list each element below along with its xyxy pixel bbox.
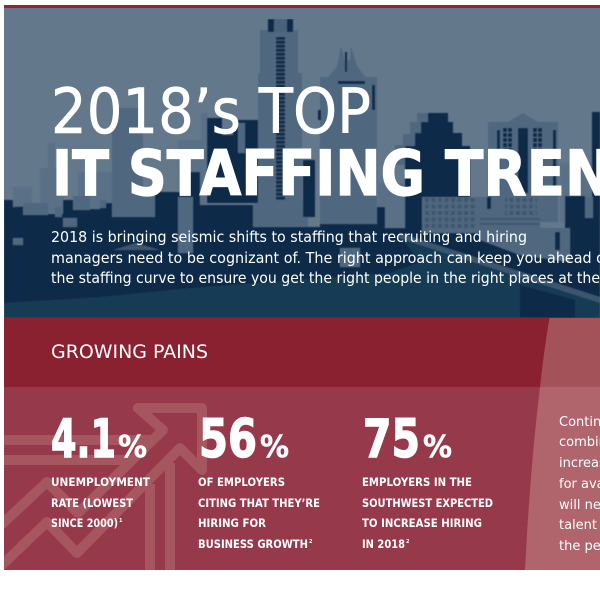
- panel: hero: [4, 8, 600, 318]
- stat: 4.1%: RATE (LOWEST: [51, 496, 133, 510]
- stat: 56%: [198, 409, 320, 551]
- stat: 56%: HIRING FOR: [198, 516, 266, 530]
- stat: 56%: 2: [309, 539, 313, 545]
- ground details: [13, 196, 593, 267]
- ziggurat: [428, 113, 448, 122]
- stat: 4.1%: 1: [119, 518, 123, 524]
- right building details: [518, 128, 528, 193]
- right building: [488, 122, 558, 222]
- stat: 56%: BUSINESS GROWTH: [198, 537, 308, 551]
- stat: 75%: 2: [406, 539, 410, 545]
- stat: 75%: [362, 409, 493, 551]
- frost tower: [320, 77, 377, 224]
- title: [54, 86, 600, 197]
- stat: 4.1%: UNEMPLOYMENT: [51, 475, 150, 489]
- stat: 56%: %: [260, 430, 289, 465]
- frost tower details: [338, 81, 365, 84]
- stat: 75%: TO INCREASE HIRING: [362, 516, 482, 530]
- dark foreground: [4, 112, 600, 318]
- stat: 75%: IN 2018: [362, 537, 405, 551]
- downtown dark block: [207, 118, 222, 203]
- top accent line: [4, 5, 600, 8]
- stat: 4.1%: SINCE 2000): [51, 516, 118, 530]
- heading: GROWING PAINS: [51, 342, 208, 363]
- title: 2018’s TOP: [51, 75, 371, 148]
- title: IT STAFFING: [52, 137, 425, 210]
- panel: side note: [525, 318, 600, 570]
- panel: growing pains header: [4, 318, 600, 388]
- road band: [4, 236, 600, 318]
- stat: 4.1%: [51, 409, 150, 530]
- stat: 56%: 56: [199, 409, 257, 470]
- stat: 56%: CITING THAT THEY’RE: [198, 496, 320, 510]
- ladder strip: [276, 37, 285, 200]
- stat: 4.1%: %: [118, 430, 147, 465]
- stat: 75%: EMPLOYERS IN THE: [362, 475, 472, 489]
- side note text: [559, 415, 600, 554]
- stair shadow: [417, 113, 428, 122]
- icon: rising arrows: [0, 408, 202, 575]
- stat: 4.1%: 4.1: [51, 409, 116, 470]
- illustration: city skyline: [4, 19, 600, 318]
- hero sky background: [4, 8, 600, 318]
- tower cap: [268, 19, 274, 32]
- main tower: [260, 30, 298, 73]
- left towers: [112, 108, 143, 218]
- stat: 75%: SOUTHWEST EXPECTED: [362, 496, 493, 510]
- intro text: [51, 228, 600, 287]
- intro text: 2018 is bringing seismic shifts to staffing that recruiting and hiring: [51, 228, 527, 246]
- stat: 56%: OF EMPLOYERS: [198, 475, 285, 489]
- stat: 75%: 75: [363, 409, 420, 470]
- base blocks: [253, 200, 308, 227]
- stat: 75%: %: [423, 430, 452, 465]
- panel: statistics: [4, 387, 540, 570]
